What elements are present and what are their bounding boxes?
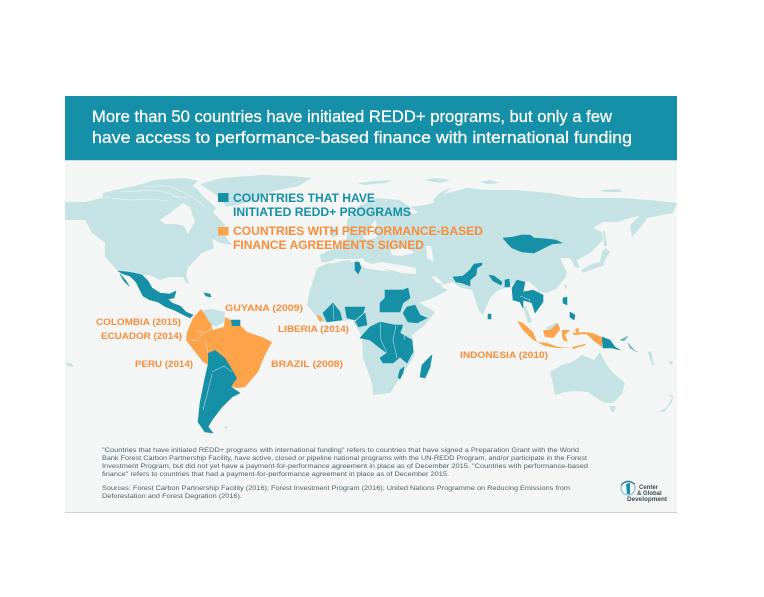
panel: map background [65,160,677,512]
seas and channels [160,203,444,285]
West Africa [323,303,342,322]
Philippines [563,297,575,320]
logo: Center for Global Development: Development [627,497,667,503]
legend item: initiated programs: COUNTRIES THAT HAVE [233,193,375,205]
logo: Center for Global Development [621,481,667,503]
Caspian [426,246,434,262]
logo: Center for Global Development: Center [639,485,659,491]
arctic islands [357,178,622,203]
countries that have initiated REDD+ programs [118,235,637,433]
legend item: performance-based finance: FINANCE AGREEMENTS SIGNED [233,240,424,252]
Mexico and Central America [118,271,193,318]
Japan and Taiwan [564,230,610,290]
Black Sea [390,248,414,256]
country labels [96,303,548,370]
Central and East Africa [360,322,413,363]
footnote: Bank Forest Carbon Partnership Facility, have active, closed or pipeline national programs with the UN-REDD Program, and/or participate in the Forest [102,456,587,462]
title: have access to performance-based finance with international funding [92,129,632,147]
Tunisia [355,262,361,274]
Indonesia: Sumatra [517,321,537,342]
Southeast Asia [512,280,543,313]
North America [65,178,232,283]
land: other countries [65,175,677,429]
Ethiopia [403,305,427,323]
Mozambique [398,367,404,379]
title: More than 50 countries have initiated REDD+ programs, but only a few [92,108,612,126]
footnote: Investment Program, but did not yet have a payment-for-performance agreement in place as of December 2015. "Countries with performance-based [102,464,588,470]
Colombia, Peru, Ecuador, Brazil and Guyana [186,309,272,388]
legend item: initiated programs: INITIATED REDD+ PROGRAMS [233,207,411,219]
country labels: COLOMBIA (2015) [96,317,181,328]
Nepal and Bangladesh [489,275,510,287]
world map [65,175,677,433]
Mongolia [503,235,562,253]
icon: globe [621,481,635,495]
sources: Deforestation and Forest Degration (2016). [102,494,242,500]
United Kingdom [330,226,338,238]
Persian Gulf [431,276,444,285]
Dominican Republic [204,293,211,297]
Africa [307,262,435,395]
Gulf of Bothnia [408,207,418,214]
footnote: "Countries that have initiated REDD+ programs with international funding" refers to countries that have signed a Preparation Grant with the World [102,448,579,454]
logo: Center for Global Development: & Global [637,491,662,497]
Indonesia: Borneo [543,323,560,338]
sources: Sources: Forest Carbon Partnership Facility (2016); Forest Investment Program (2016); United Nations Programme on Reducing Emissions from [102,486,570,492]
Sudan [380,288,410,312]
Eurasia [320,188,677,315]
footnote: finance" refers to countries that had a payment-for-performance agreement in place as of December 2015. [102,472,449,478]
Mediterranean [326,259,416,274]
Papua New Guinea [602,337,620,350]
Indonesia: Sulawesi and Moluccas [562,328,586,342]
country labels: PERU (2014) [135,359,193,370]
country labels: BRAZIL (2008) [271,359,343,370]
Indonesia: Java and lesser islands [537,342,586,349]
legend item: performance-based finance: COUNTRIES WITH PERFORMANCE-BASED [233,226,483,238]
country labels: INDONESIA (2010) [460,350,548,361]
southern cone [198,350,240,433]
country borders [188,296,530,410]
Pakistan [453,263,482,286]
Suriname [231,320,240,326]
New Zealand [650,393,673,417]
Sri Lanka [488,314,491,319]
Indonesia: Papua [583,332,602,347]
Greenland [200,175,312,207]
country labels: LIBERIA (2014) [278,324,349,335]
country labels: ECUADOR (2014) [101,331,182,342]
Malay peninsula and small islands [65,306,673,429]
Liberia [316,315,323,322]
Hudson Bay [160,203,195,234]
Baltic [363,219,378,240]
legend item: initiated programs [218,193,411,219]
countries with performance-based finance agreements [186,309,602,388]
legend [218,193,483,252]
legend item: performance-based finance [218,226,483,252]
Australia [550,352,625,412]
country labels: GUYANA (2009) [225,303,303,314]
Madagascar [420,355,432,378]
header banner [65,96,677,161]
